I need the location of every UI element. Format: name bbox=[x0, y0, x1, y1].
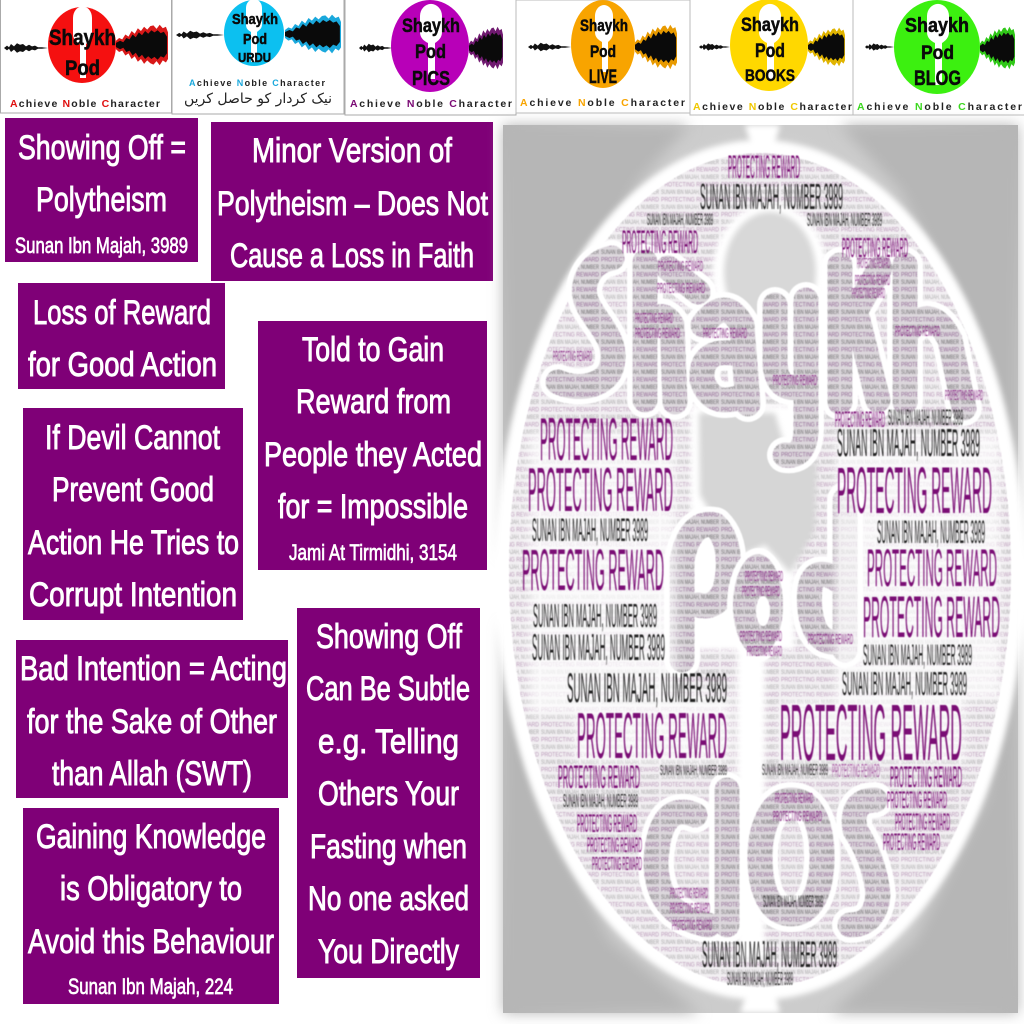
logo: Shaykh Pod Live bbox=[516, 0, 690, 113]
logo: Shaykh Pod: Shaykh bbox=[49, 25, 116, 50]
panel: bad intention: Bad Intention = Acting bbox=[20, 650, 287, 688]
logo: Shaykh Pod Urdu bbox=[172, 0, 344, 114]
logo: Shaykh Pod Blog: Achieve Noble Character bbox=[857, 101, 1022, 113]
panel: devil corrupts intention: Action He Tries to bbox=[28, 524, 239, 562]
panel: showing off equals polytheism: Showing Off = bbox=[18, 129, 186, 167]
small labels within letters: PROTECTING REWARD bbox=[742, 583, 780, 600]
large word cloud labels: SUNAN IBN MAJAH, NUMBER 3989 bbox=[647, 210, 713, 229]
panel: bad intention: for the Sake of Other bbox=[27, 703, 277, 741]
logo: Shaykh Pod Live: LIVE bbox=[589, 67, 617, 88]
panel: showing off can be subtle: Showing Off bbox=[316, 618, 462, 656]
logo: Shaykh Pod Pics: PICS bbox=[412, 68, 450, 90]
small labels within letters: PROTECTING REWARD bbox=[775, 790, 813, 807]
logo: Shaykh Pod Live: Achieve Noble Character bbox=[520, 97, 685, 109]
logo: Shaykh Pod Books: Shaykh bbox=[741, 15, 799, 36]
small labels within letters: PROTECTING REWARD bbox=[670, 900, 710, 917]
small labels within letters: PROTECTING REWARD bbox=[852, 285, 885, 302]
panel: gaining knowledge is obligatory: is Obligatory to bbox=[60, 870, 242, 908]
small labels within letters: PROTECTING REWARD bbox=[672, 917, 712, 934]
panel: showing off can be subtle: You Directly bbox=[318, 933, 459, 971]
panel: devil corrupts intention: If Devil Cannot bbox=[45, 419, 220, 457]
large word cloud labels: SUNAN IBN MAJAH, NUMBER 3989 bbox=[727, 969, 793, 989]
logo: Shaykh Pod Books: BOOKS bbox=[745, 66, 795, 85]
logo: Shaykh Pod Urdu: URDU bbox=[238, 50, 271, 65]
large word cloud labels: PROTECTING REWARD bbox=[577, 810, 637, 838]
panel: told to gain reward from people: for = Impossible bbox=[278, 488, 468, 526]
logo: Shaykh Pod: Pod bbox=[65, 57, 100, 80]
logo: Shaykh Pod Blog: Pod bbox=[921, 43, 954, 64]
large word cloud labels: SUNAN IBN MAJAH, NUMBER 3989 bbox=[762, 762, 828, 779]
small labels within letters: PROTECTING REWARD bbox=[740, 628, 782, 645]
small labels within letters: PROTECTING REWARD bbox=[773, 372, 817, 389]
small labels within letters: PROTECTING REWARD bbox=[773, 808, 822, 825]
small labels within letters: PROTECTING REWARD bbox=[657, 280, 705, 297]
small labels within letters: PROTECTING REWARD bbox=[670, 885, 708, 902]
small labels within letters bbox=[553, 255, 983, 934]
small labels within letters: PROTECTING REWARD bbox=[745, 568, 783, 585]
panel: gaining knowledge is obligatory: Gaining Knowledge bbox=[36, 818, 266, 856]
panel: devil corrupts intention: Corrupt Intention bbox=[29, 576, 237, 614]
logo: Shaykh Pod Live: Shaykh bbox=[580, 16, 628, 35]
panel: showing off can be subtle: Can Be Subtle bbox=[306, 670, 470, 708]
small labels within letters: PROTECTING REWARD bbox=[808, 631, 853, 648]
panel: gaining knowledge is obligatory: Sunan Ibn Majah, 224 bbox=[68, 974, 233, 999]
white clearing behind large labels bbox=[528, 432, 1000, 762]
logo: Shaykh Pod Pics: Achieve Noble Character bbox=[350, 98, 512, 110]
panel: told to gain reward from people: People they Acted bbox=[264, 436, 482, 474]
logo: Shaykh Pod Urdu: نیک کردار کو حاصل کریں bbox=[184, 91, 332, 107]
panel: showing off can be subtle: Fasting when bbox=[310, 828, 467, 866]
large word cloud labels: SUNAN IBN MAJAH, NUMBER 3989 bbox=[660, 762, 727, 779]
panel: showing off can be subtle: Others Your bbox=[318, 775, 459, 813]
word-art letters: Shaykh Pod Pics bbox=[558, 258, 964, 925]
panel: minor version of polytheism: Polytheism – Does Not bbox=[217, 185, 488, 223]
panel: showing off equals polytheism: Polytheism bbox=[36, 181, 167, 219]
small labels within letters: PROTECTING REWARD bbox=[747, 643, 782, 660]
large word cloud labels: PROTECTING REWARD bbox=[592, 854, 642, 874]
logo: Shaykh Pod: Achieve Noble Character bbox=[10, 98, 160, 110]
logo: Shaykh Pod Blog: BLOG bbox=[914, 67, 961, 90]
large word cloud labels: PROTECTING REWARD bbox=[622, 224, 698, 260]
panel: showing off equals polytheism bbox=[5, 118, 198, 262]
panel: minor version of polytheism bbox=[211, 122, 493, 281]
logo: Shaykh Pod bbox=[0, 0, 172, 113]
panel: showing off can be subtle bbox=[297, 608, 480, 978]
small labels within letters: PROTECTING REWARD bbox=[658, 258, 703, 275]
logo: Shaykh Pod Books bbox=[690, 0, 853, 115]
small labels within letters: PROTECTING REWARD bbox=[553, 348, 592, 365]
small labels within letters: PROTECTING REWARD bbox=[857, 255, 890, 272]
panel: loss of reward: Loss of Reward bbox=[33, 294, 211, 332]
large word cloud labels: PROTECTING REWARD bbox=[558, 759, 640, 795]
microphone silhouette bbox=[690, 203, 828, 960]
panel: told to gain reward from people: Jami At Tirmidhi, 3154 bbox=[289, 540, 457, 565]
panel: minor version of polytheism: Cause a Loss in Faith bbox=[230, 237, 474, 275]
word cloud image panel bbox=[495, 125, 1024, 1013]
small labels within letters: PROTECTING REWARD bbox=[855, 272, 890, 289]
small labels within letters: PROTECTING REWARD bbox=[635, 310, 673, 327]
small labels within letters: PROTECTING REWARD bbox=[635, 325, 680, 342]
large word cloud labels: SUNAN IBN MAJAH, NUMBER 3989 bbox=[563, 791, 638, 811]
panel: loss of reward bbox=[18, 283, 225, 389]
small labels within letters: PROTECTING REWARD bbox=[703, 325, 747, 342]
panel: bad intention: than Allah (SWT) bbox=[52, 755, 252, 793]
panel: showing off can be subtle: e.g. Telling bbox=[318, 723, 459, 761]
logo: Shaykh Pod Books: Achieve Noble Character bbox=[693, 101, 852, 113]
logo: Shaykh Pod Blog bbox=[853, 0, 1024, 115]
logo: Shaykh Pod Urdu: Achieve Noble Character bbox=[189, 78, 325, 88]
panel: gaining knowledge is obligatory: Avoid this Behaviour bbox=[28, 923, 274, 961]
panel: bad intention bbox=[16, 640, 288, 798]
panel: showing off can be subtle: No one asked bbox=[308, 880, 469, 918]
panel: told to gain reward from people: Told to Gain bbox=[302, 331, 444, 369]
panel: told to gain reward from people: Reward from bbox=[296, 383, 451, 421]
logo: Shaykh Pod Books: Pod bbox=[755, 41, 785, 62]
logo: Shaykh Pod Blog: Shaykh bbox=[905, 15, 969, 37]
large word cloud labels: PROTECTING REWARD bbox=[587, 834, 642, 857]
panel: gaining knowledge is obligatory bbox=[23, 808, 279, 1004]
panel: devil corrupts intention: Prevent Good bbox=[52, 471, 214, 509]
panel: showing off equals polytheism: Sunan Ibn Majah, 3989 bbox=[15, 233, 188, 258]
logo: Shaykh Pod Urdu: Shaykh bbox=[232, 11, 278, 28]
logo: Shaykh Pod Live: Pod bbox=[590, 42, 616, 61]
logo: Shaykh Pod Pics: Shaykh bbox=[402, 16, 460, 37]
logo: Shaykh Pod Pics bbox=[345, 0, 516, 115]
panel: loss of reward: for Good Action bbox=[28, 346, 217, 384]
logo: Shaykh Pod Pics: Pod bbox=[415, 42, 446, 63]
panel: minor version of polytheism: Minor Version of bbox=[252, 132, 452, 170]
panel: told to gain reward from people bbox=[258, 321, 487, 570]
panel: devil corrupts intention bbox=[23, 408, 243, 620]
large word cloud labels bbox=[522, 149, 1000, 989]
logo: Shaykh Pod Urdu: Pod bbox=[243, 31, 267, 48]
